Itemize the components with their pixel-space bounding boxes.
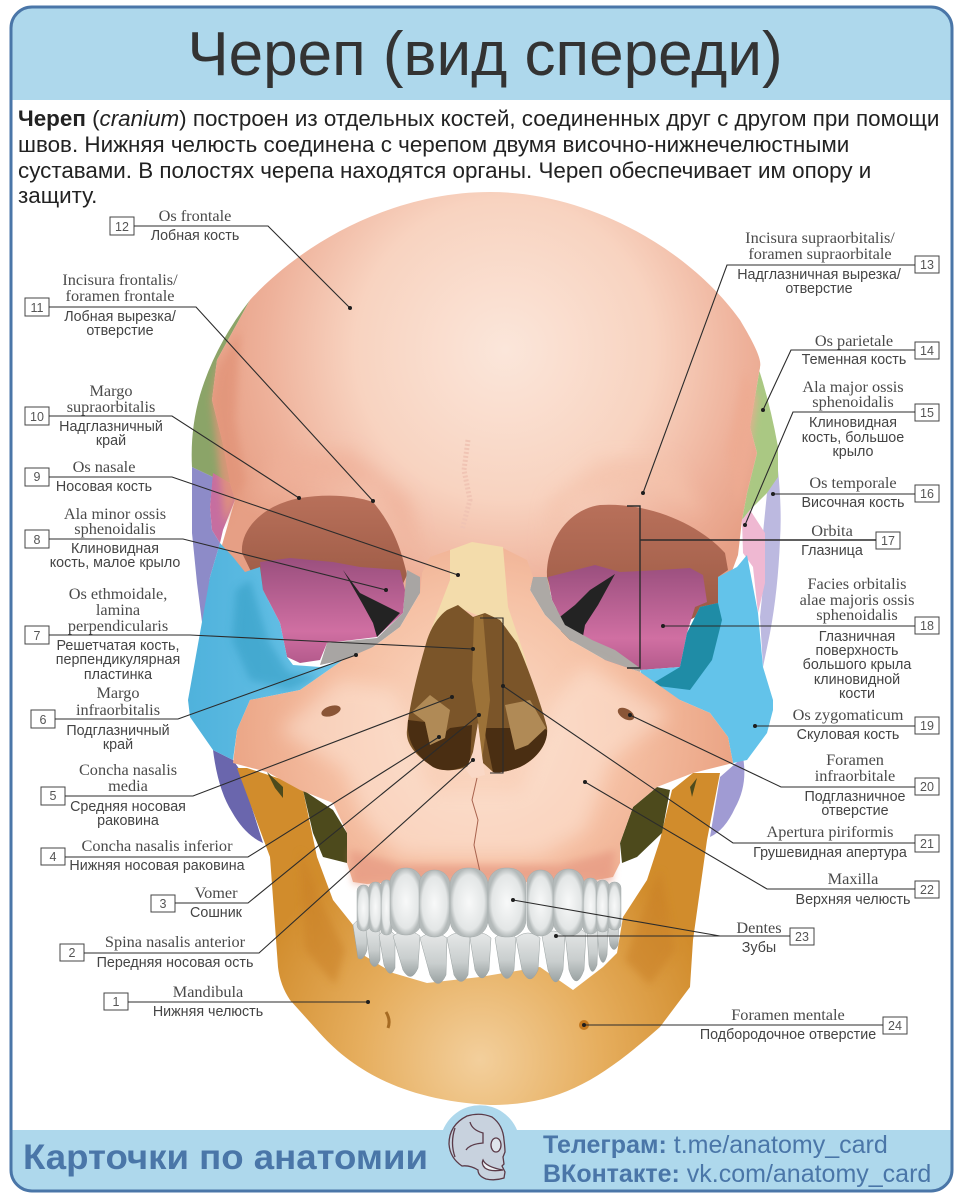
- frontal right shading: [728, 370, 757, 510]
- label 14: Os parietale: 14: [920, 344, 934, 358]
- label 3: Vomer: Сошник: [190, 905, 243, 921]
- zygomatic right: [640, 555, 773, 763]
- label 3: Vomer: [151, 713, 481, 921]
- label 13: Incisura supraorbitalis: отверстие: [785, 281, 853, 297]
- label 5: Concha nasalis media: media: [108, 776, 148, 795]
- label 21: Apertura piriformis: 21: [920, 837, 934, 851]
- label 23: Dentes: Зубы: [742, 940, 776, 956]
- intro text block: [18, 106, 939, 208]
- label 7: Os ethmoidale: [25, 584, 475, 683]
- label 10: Margo supraorbitalis: край: [96, 433, 126, 449]
- orbital wing right: [548, 565, 707, 670]
- label 9: Os nasale: 9: [34, 470, 41, 484]
- temporal bone right: [760, 470, 781, 667]
- label 5: Concha nasalis media: Concha nasalis: [79, 760, 177, 779]
- label 7: Os ethmoidale: Os ethmoidale,: [69, 584, 167, 603]
- label 4: Concha nasalis inferior: [41, 735, 441, 874]
- label 18: Facies orbitalis: [661, 574, 939, 702]
- zygomatic right teal: [650, 603, 722, 690]
- label 21: Apertura piriformis: Грушевидная апертура: [753, 845, 907, 861]
- facial suture: [472, 778, 480, 872]
- label 11: Incisura frontalis: Incisura frontalis/: [62, 270, 178, 289]
- label 10: Margo supraorbitalis: 10: [30, 410, 44, 424]
- intro text block: защиту.: [18, 183, 97, 208]
- label 17: Orbita: [627, 506, 900, 668]
- label 15: Ala major: [743, 377, 939, 527]
- label 18: Facies orbitalis: Facies orbitalis: [807, 574, 907, 593]
- icon: skull: [449, 1114, 505, 1180]
- label 2: Spina nasalis anterior: [60, 758, 475, 971]
- label 3: Vomer: 3: [160, 897, 167, 911]
- label 8: Ala minor: кость, малое крыло: [50, 555, 180, 571]
- label 22: Maxilla: Maxilla: [828, 869, 878, 888]
- label 17: Orbita: 17: [881, 534, 895, 548]
- label 18: Facies orbitalis: Глазничная: [819, 629, 895, 645]
- label 19: Os zygomaticum: [753, 705, 939, 743]
- title: Череп (вид спереди): [187, 20, 783, 89]
- conchae: [412, 695, 546, 750]
- lower teeth: [353, 916, 619, 984]
- label 2: Spina nasalis anterior: Spina nasalis anterior: [105, 932, 246, 951]
- label 12: Os frontale: 12: [115, 220, 129, 234]
- label 16: Os temporale: Os temporale: [809, 473, 897, 492]
- label 1: Mandibula: Mandibula: [173, 982, 243, 1001]
- label 4: Concha nasalis inferior: Нижняя носовая раковина: [69, 858, 245, 874]
- label 6: Margo infraorbitalis: [31, 653, 358, 753]
- intro text block: Череп (cranium) построен из отдельных костей, соединенных друг с другом при помощи: [18, 106, 939, 131]
- label 1: Mandibula: [104, 982, 370, 1020]
- label 10: Margo supraorbitalis: Margo: [89, 381, 133, 400]
- skull illustration: [188, 192, 781, 1105]
- label 10: Margo supraorbitalis: [25, 381, 301, 500]
- zygomatic left: [188, 543, 343, 760]
- sinus shadow left: [303, 790, 347, 863]
- label 11: Incisura frontalis: отверстие: [86, 323, 154, 339]
- lacrimal right: [530, 577, 640, 672]
- label 8: Ala minor: 8: [34, 533, 41, 547]
- mandible ridge shading: [300, 850, 675, 985]
- central bright face: [280, 665, 670, 855]
- label 15: Ala major: крыло: [833, 444, 874, 460]
- label 8: Ala minor: Ala minor ossis: [64, 504, 166, 523]
- orbital fissure right: [556, 574, 615, 642]
- nasal spine: [466, 723, 485, 778]
- nasal bones: [423, 542, 533, 690]
- label 16: Os temporale: 16: [920, 487, 934, 501]
- sinus shadow right: [620, 787, 670, 863]
- frontal suture: [462, 440, 470, 530]
- label 7: Os ethmoidale: lamina: [96, 600, 140, 619]
- label 19: Os zygomaticum: 19: [920, 719, 934, 733]
- label 15: Ala major: Клиновидная: [809, 415, 897, 431]
- upper teeth: [357, 868, 621, 937]
- label 10: Margo supraorbitalis: supraorbitalis: [67, 397, 155, 416]
- label 5: Concha nasalis media: [41, 695, 454, 829]
- label 20: Foramen infraorbitale: [628, 713, 939, 819]
- label 23: Dentes: [511, 898, 814, 956]
- label 9: Os nasale: Os nasale: [73, 457, 135, 476]
- label 19: Os zygomaticum: Скуловая кость: [797, 727, 899, 743]
- greater wing left outer: [210, 473, 235, 543]
- greater wing right outer: [742, 510, 765, 613]
- footer brand: Карточки по анатомии: [23, 1137, 428, 1177]
- temporal bone right lower: [710, 757, 744, 837]
- sinus shadow left small: [267, 772, 283, 798]
- label 17: Orbita: Orbita: [811, 521, 853, 540]
- footer links: Телеграм: t.me/anatomy_card: [543, 1131, 888, 1159]
- brow shading left: [250, 450, 420, 560]
- label 11: Incisura frontalis: foramen frontale: [66, 286, 174, 305]
- label 13: Incisura supraorbitalis: 13: [920, 258, 934, 272]
- label 14: Os parietale: Os parietale: [815, 331, 893, 350]
- label 11: Incisura frontalis: 11: [31, 301, 44, 315]
- label 1: Mandibula: Нижняя челюсть: [153, 1004, 263, 1020]
- label 20: Foramen infraorbitale: отверстие: [821, 803, 889, 819]
- label 20: Foramen infraorbitale: infraorbitale: [815, 766, 895, 785]
- label 20: Foramen infraorbitale: Подглазничное: [805, 789, 906, 805]
- label 13: Incisura supraorbitalis: foramen supraorbitale: [748, 244, 892, 263]
- gum shading: [350, 850, 615, 884]
- label 14: Os parietale: Теменная кость: [802, 352, 906, 368]
- label 21: Apertura piriformis: [480, 618, 939, 861]
- maxilla: [233, 545, 733, 884]
- nasal septum: [472, 615, 490, 760]
- infraorbital foramen right: [616, 705, 636, 723]
- label 24: Foramen mentale: Foramen mentale: [731, 1005, 845, 1024]
- zygomatic left rim shadow: [232, 580, 320, 690]
- orbital wing left: [260, 558, 405, 663]
- aperture dark areas: [408, 720, 547, 772]
- label 18: Facies orbitalis: alae majoris ossis: [800, 590, 914, 609]
- label 5: Concha nasalis media: Средняя носовая: [70, 799, 186, 815]
- label 6: Margo infraorbitalis: Margo: [96, 683, 140, 702]
- label 12: Os frontale: Лобная кость: [151, 228, 239, 244]
- footer links: ВКонтакте: vk.com/anatomy_card: [543, 1160, 931, 1188]
- label 20: Foramen infraorbitale: 20: [920, 780, 934, 794]
- label 1: Mandibula: 1: [113, 995, 120, 1009]
- label 18: Facies orbitalis: поверхность: [815, 643, 899, 659]
- parietal bone left: [192, 300, 250, 483]
- label 7: Os ethmoidale: Решетчатая кость,: [57, 638, 179, 654]
- label 5: Concha nasalis media: раковина: [97, 813, 159, 829]
- label 23: Dentes: 23: [795, 930, 809, 944]
- label 9: Os nasale: Носовая кость: [56, 479, 152, 495]
- brow shading right: [545, 460, 705, 560]
- label 14: Os parietale: [761, 331, 939, 412]
- temporal bone left lower: [213, 750, 263, 843]
- infraorbital foramen left: [320, 703, 342, 719]
- label 18: Facies orbitalis: клиновидной: [814, 672, 900, 688]
- label 6: Margo infraorbitalis: infraorbitalis: [76, 700, 160, 719]
- orbital fissure left: [343, 570, 400, 637]
- nasal aperture: [407, 605, 547, 772]
- label 18: Facies orbitalis: кости: [839, 686, 875, 702]
- label 18: Facies orbitalis: sphenoidalis: [816, 605, 898, 624]
- label 4: Concha nasalis inferior: 4: [50, 850, 57, 864]
- label 6: Margo infraorbitalis: Подглазничный: [66, 723, 170, 739]
- sinus shadow right small: [690, 778, 697, 797]
- label 15: Ala major: 15: [920, 406, 934, 420]
- orbit right: [547, 505, 728, 620]
- label 22: Maxilla: 22: [920, 883, 934, 897]
- orbit left: [242, 496, 407, 590]
- label 6: Margo infraorbitalis: 6: [40, 713, 47, 727]
- label 12: Os frontale: Os frontale: [159, 206, 231, 225]
- label 5: Concha nasalis media: 5: [50, 789, 57, 803]
- label 4: Concha nasalis inferior: Concha nasalis inferior: [81, 836, 233, 855]
- label 13: Incisura supraorbitalis: Incisura supraorbitalis/: [745, 228, 895, 247]
- label 17: Orbita: Глазница: [801, 543, 863, 559]
- intro text block: швов. Нижняя челюсть соединена с черепом двумя височно-нижнечелюстными: [18, 132, 849, 157]
- label 7: Os ethmoidale: пластинка: [84, 667, 152, 683]
- label 16: Os temporale: Височная кость: [802, 495, 904, 511]
- label 22: Maxilla: [583, 780, 939, 908]
- mental foramen left: [386, 1012, 389, 1028]
- frontal temporal-line shading: [212, 330, 245, 525]
- label 11: Incisura frontalis: [25, 270, 375, 503]
- label 11: Incisura frontalis: Лобная вырезка/: [64, 309, 176, 325]
- label 18: Facies orbitalis: 18: [920, 619, 934, 633]
- mental foramen right: [579, 1020, 589, 1030]
- label 16: Os temporale: [771, 473, 939, 511]
- label 3: Vomer: Vomer: [194, 883, 238, 902]
- label 12: Os frontale: [110, 206, 352, 310]
- label 7: Os ethmoidale: perpendicularis: [68, 616, 168, 635]
- label 8: Ala minor: [25, 504, 388, 592]
- label 15: Ala major: кость, большое: [802, 430, 904, 446]
- frontal bone: [212, 192, 760, 600]
- label 13: Incisura supraorbitalis: Надглазничная вырезка/: [737, 267, 901, 283]
- temporal bone left upper: [192, 467, 220, 630]
- mandible: [237, 768, 720, 1105]
- footer band: [12, 1105, 951, 1190]
- label 18: Facies orbitalis: большого крыла: [803, 657, 911, 673]
- lacrimal left: [320, 570, 420, 665]
- intro text block: суставами. В полостях черепа находятся органы. Череп обеспечивает им опору и: [18, 158, 871, 183]
- header band: [12, 7, 951, 100]
- label 24: Foramen mentale: 24: [888, 1019, 902, 1033]
- label 22: Maxilla: Верхняя челюсть: [796, 892, 910, 908]
- label 9: Os nasale: [25, 457, 460, 577]
- label 23: Dentes: Dentes: [736, 918, 782, 937]
- footer links: [543, 1131, 931, 1188]
- label 19: Os zygomaticum: Os zygomaticum: [793, 705, 904, 724]
- label 15: Ala major: Ala major ossis: [802, 377, 904, 396]
- label 24: Foramen mentale: [582, 1005, 907, 1043]
- label 8: Ala minor: sphenoidalis: [74, 519, 156, 538]
- parietal bone right: [740, 320, 778, 520]
- label 24: Foramen mentale: Подбородочное отверстие: [700, 1027, 876, 1043]
- label 7: Os ethmoidale: перпендикулярная: [56, 652, 180, 668]
- label 7: Os ethmoidale: 7: [34, 629, 41, 643]
- label 6: Margo infraorbitalis: край: [103, 737, 133, 753]
- label 13: Incisura supraorbitalis: [641, 228, 939, 495]
- label 20: Foramen infraorbitale: Foramen: [826, 750, 884, 769]
- label 15: Ala major: sphenoidalis: [812, 392, 894, 411]
- label 8: Ala minor: Клиновидная: [71, 541, 159, 557]
- label 21: Apertura piriformis: Apertura piriformis: [766, 822, 894, 841]
- label 10: Margo supraorbitalis: Надглазничный: [59, 419, 163, 435]
- label 2: Spina nasalis anterior: Передняя носовая ость: [97, 955, 253, 971]
- label 2: Spina nasalis anterior: 2: [69, 946, 76, 960]
